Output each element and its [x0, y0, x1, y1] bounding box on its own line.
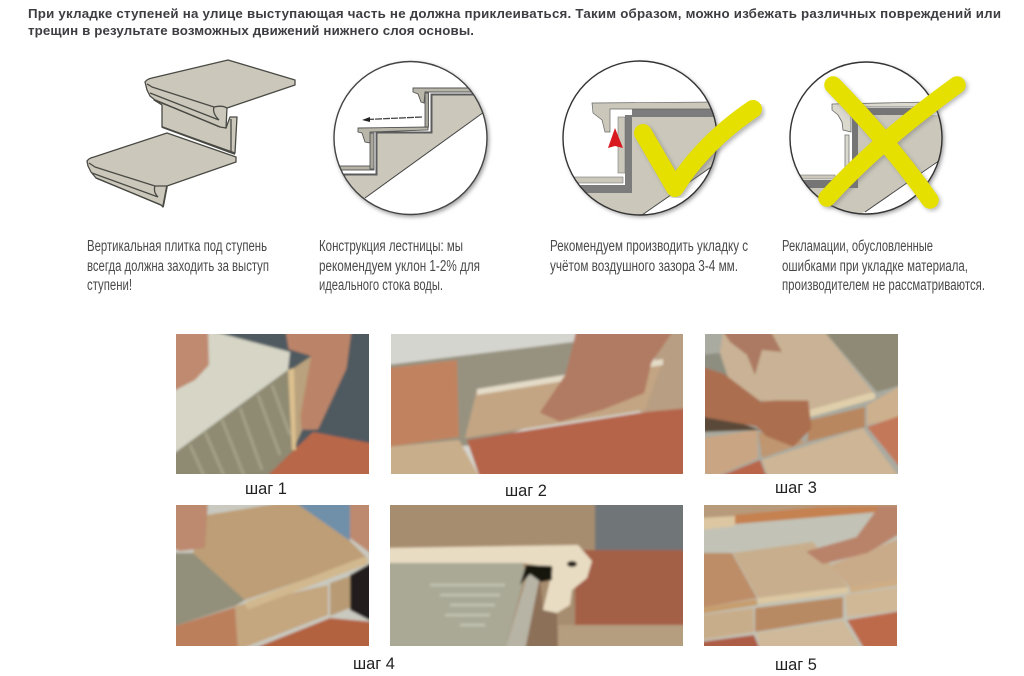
caption: vertical tile: ступени! [87, 277, 132, 294]
caption: air gap: Рекомендуем производить укладку с [550, 238, 748, 255]
photo: step 3 [705, 334, 898, 474]
caption: stair construction: идеального стока воды. [319, 277, 443, 294]
icon: yellow cross [827, 85, 959, 202]
label: step 4: шаг 4 [353, 655, 395, 673]
caption: stair construction: рекомендуем уклон 1-2% для [319, 258, 480, 275]
photo: step 5 [700, 501, 901, 651]
caption: air gap: учётом воздушного зазора 3-4 мм. [550, 258, 738, 275]
lower step [87, 133, 236, 207]
caption: vertical tile [87, 238, 269, 294]
riser tile [154, 100, 237, 153]
label: step 1: шаг 1 [245, 480, 287, 498]
caption: vertical tile: Вертикальная плитка под ступень [87, 238, 267, 255]
photo: profile close-up [386, 501, 687, 651]
label: step 3: шаг 3 [775, 479, 817, 497]
caption: claims [782, 238, 985, 294]
upper step [145, 60, 295, 128]
photo: step 4 [172, 501, 373, 651]
caption: stair construction: Конструкция лестницы: мы [319, 238, 463, 255]
title: При укладке ступеней на улице выступающая часть не должна приклеиваться. Таким образом, можно избежать различных повреждений или [28, 6, 1001, 21]
caption: air gap [550, 238, 748, 275]
caption: claims: Рекламации, обусловленные [782, 238, 933, 255]
icon: red arrow [608, 128, 623, 148]
photo: step 2 [391, 334, 683, 474]
illustration: stair slope circle [330, 62, 495, 217]
illustration: incorrect installation circle [785, 62, 959, 225]
icon: yellow check mark [643, 109, 755, 190]
photo: step 1 [176, 334, 369, 474]
label: step 5: шаг 5 [775, 656, 817, 674]
illustration: correct air gap circle [560, 61, 755, 225]
caption: vertical tile: всегда должна заходить за выступ [87, 258, 269, 275]
title [28, 6, 1001, 38]
label: step 2: шаг 2 [505, 482, 547, 500]
illustration: two stair steps [87, 60, 295, 207]
title: трещин в результате возможных движений нижнего слоя основы. [28, 23, 474, 38]
arrow: water runoff [362, 117, 422, 122]
caption: stair construction [319, 238, 480, 294]
